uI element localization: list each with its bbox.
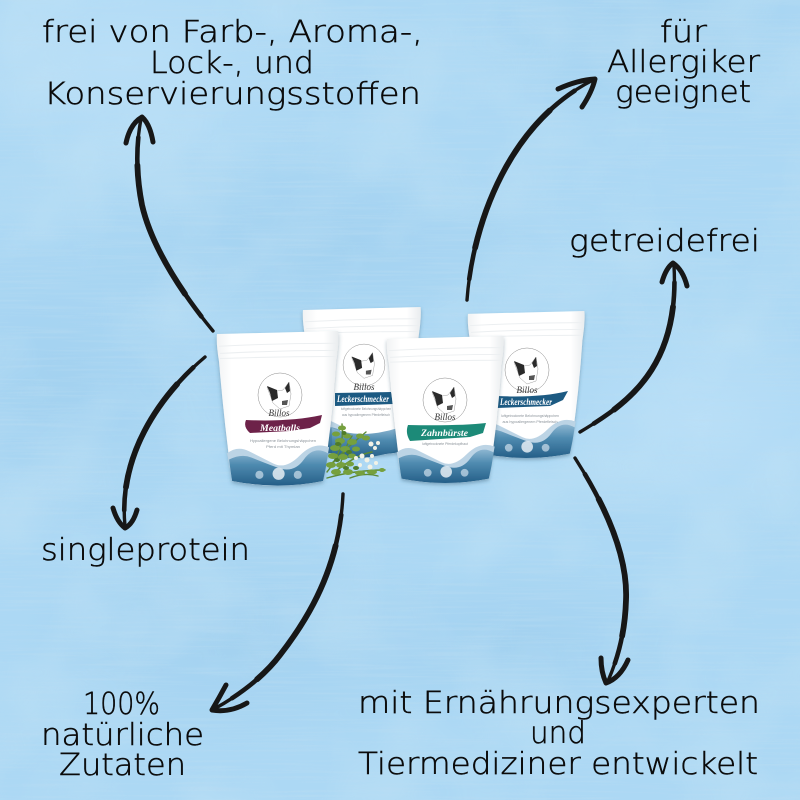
product: Leckerschmecker pouch (back right): Leckerschmecker — [499, 398, 552, 408]
text: mit Ernährungsexperten und Tiermediziner entwickelt: und — [530, 716, 586, 751]
product: Leckerschmecker pouch (back left): luftgetrocknete Belohnungshäppchen — [341, 407, 391, 411]
text: für Allergiker geeignet: für — [660, 15, 708, 50]
text: mit Ernährungsexperten und Tiermediziner entwickelt: Tiermediziner entwickelt — [358, 747, 758, 782]
product: Leckerschmecker pouch (back left): Leckerschmecker — [336, 395, 389, 405]
product: Zahnbürste pouch: Billos — [434, 412, 456, 422]
text: getreidefrei: getreidefrei — [569, 224, 760, 259]
product: Meatballs pouch: Hypoallergene Belohnungshäppchen — [250, 439, 316, 443]
arrow: to frei von Farbstoffen — [126, 117, 213, 331]
arrow: to singleprotein — [113, 357, 205, 528]
product: Leckerschmecker pouch (back left): aus hypoallergenem Pferdefleisch — [342, 413, 390, 417]
text: mit Ernährungsexperten und Tiermediziner entwickelt — [358, 686, 760, 782]
text: 100% natürliche Zutaten: Zutaten — [59, 748, 186, 783]
product: Leckerschmecker pouch (back right) — [468, 311, 585, 458]
text: 100% natürliche Zutaten: natürliche — [41, 718, 204, 753]
product: Zahnbürste pouch: Zahnbürste — [420, 429, 469, 439]
product: Leckerschmecker pouch (back left): Billos — [353, 382, 375, 392]
text: frei von Farb-, Aroma-, Lock-, und Konservierungsstoffen: Konservierungsstoffen — [44, 77, 421, 112]
text: 100% natürliche Zutaten: 100% — [83, 687, 160, 722]
product: Zahnbürste pouch — [387, 336, 504, 483]
text: für Allergiker geeignet — [607, 15, 761, 110]
text: frei von Farb-, Aroma-, Lock-, und Konservierungsstoffen: Lock-, und — [150, 46, 314, 81]
arrow: to Ernährungsexperten — [575, 458, 628, 683]
product: Leckerschmecker pouch (back left) — [303, 307, 421, 458]
illustration: thyme sprigs — [326, 424, 385, 478]
text: frei von Farb-, Aroma-, Lock-, und Konservierungsstoffen: frei von Farb-, Aroma-, — [42, 15, 423, 50]
product: Leckerschmecker pouch (back right): luftgetrocknete Belohnungshäppchen — [501, 414, 559, 418]
text: für Allergiker geeignet: Allergiker — [607, 45, 761, 80]
text: singleprotein: singleprotein — [41, 533, 250, 568]
product: Meatballs pouch: Pferd mit Thymian — [266, 445, 300, 449]
text: für Allergiker geeignet: geeignet — [615, 75, 751, 110]
product: Leckerschmecker pouch (back right): aus hypoallergenem Pferdefleisch — [502, 420, 558, 424]
product: Leckerschmecker pouch (back right): Billos — [516, 385, 538, 395]
arrow: to für Allergiker geeignet — [467, 79, 595, 300]
product: Meatballs pouch: Billos — [268, 408, 290, 418]
text: mit Ernährungsexperten und Tiermediziner entwickelt: mit Ernährungsexperten — [358, 686, 760, 721]
product: Zahnbürste pouch: luftgetrocknete Pferdekopfhaut — [422, 442, 468, 446]
text: 100% natürliche Zutaten — [41, 687, 204, 783]
product: Meatballs pouch — [217, 331, 338, 486]
arrow: to getreidefrei — [580, 263, 687, 432]
text: frei von Farb-, Aroma-, Lock-, und Konservierungsstoffen — [42, 15, 423, 112]
arrow: to 100% natürliche Zutaten — [212, 494, 343, 711]
product: Meatballs pouch: Meatballs — [259, 424, 300, 434]
